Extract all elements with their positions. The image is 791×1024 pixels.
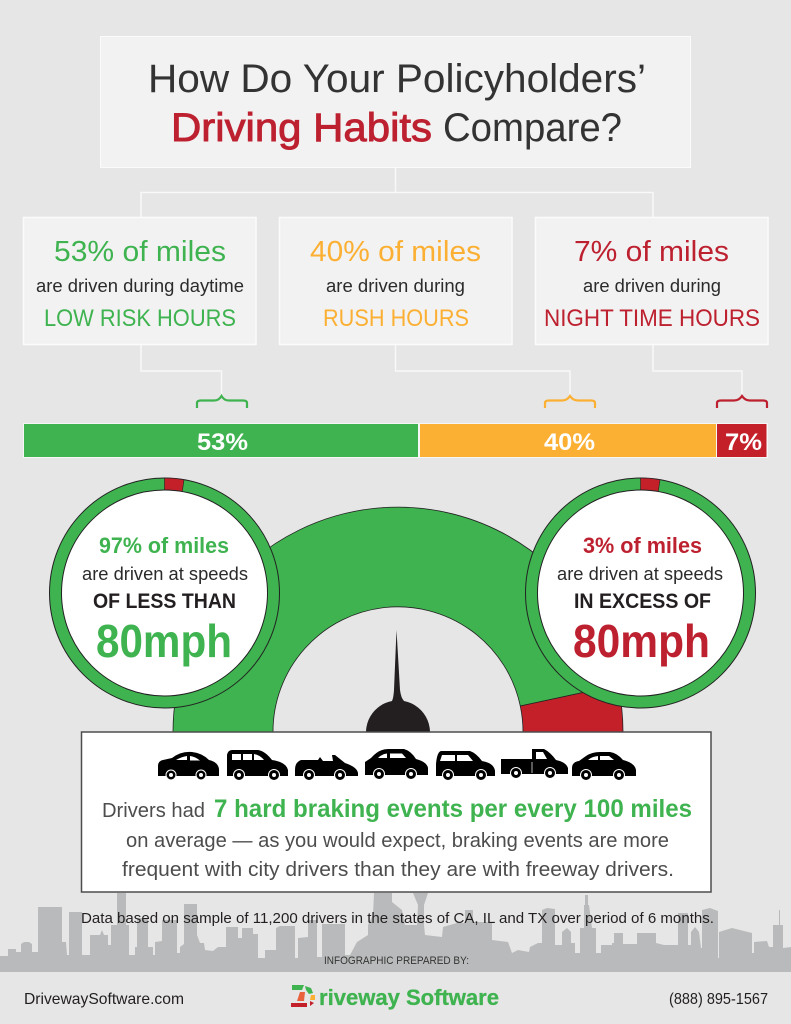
icon: minivan [227, 750, 288, 780]
bar: 53%: 53% [197, 429, 248, 456]
donut: under 80 mph: are driven at speeds [82, 564, 248, 584]
callout line 1: Drivers had [102, 800, 205, 822]
panel: low risk hours: LOW RISK HOURS [44, 305, 236, 332]
connectors: stat boxes to bar braces [141, 345, 742, 396]
panel: night time hours: NIGHT TIME HOURS [544, 305, 760, 332]
gauge: needle [366, 630, 430, 764]
stacked bar chart [23, 423, 768, 458]
panel: rush hours: RUSH HOURS [323, 305, 469, 332]
donut: over 80 mph: 3% of miles [583, 533, 702, 558]
callout line 2: on average — as you would expect, braking events are more [126, 830, 669, 852]
gauge: red arc [520, 685, 623, 732]
panel: rush hours: 40% of miles [310, 236, 481, 268]
callout line 1: 7 hard braking events per every 100 miles [214, 795, 692, 823]
panel: braking callout [82, 732, 711, 892]
donut: under 80 mph: OF LESS THAN [93, 590, 236, 613]
bar: 7%: 7% [725, 429, 762, 456]
icon: pickup truck [501, 749, 568, 778]
panel: low risk hours [24, 218, 256, 344]
icon row: cars [158, 749, 636, 780]
connector: title to stat boxes [141, 168, 653, 217]
title line 1: How Do Your Policyholders’ [148, 57, 646, 101]
title panel [100, 36, 690, 168]
donut: over 80 mph: IN EXCESS OF [574, 590, 711, 613]
title line 2: Driving Habits [171, 106, 432, 150]
donut: over 80 mph [526, 478, 756, 708]
icon: hatchback [436, 751, 495, 780]
footer: phone: (888) 895-1567 [669, 991, 768, 1008]
donut: over 80 mph: 80mph [573, 615, 710, 667]
footer: logo [291, 985, 499, 1010]
gauge: green arc [173, 507, 618, 732]
donut: over 80 mph: are driven at speeds [557, 564, 723, 584]
icon: compact sedan [572, 752, 636, 780]
panel: night time hours: 7% of miles [574, 236, 729, 268]
icon: convertible [295, 755, 358, 780]
panel: night time hours: are driven during [583, 276, 721, 296]
bar: 53% [24, 424, 418, 457]
brace: red [717, 396, 767, 408]
callout line 3: frequent with city drivers than they are with freeway drivers. [122, 859, 674, 881]
title line 2: Compare? [443, 106, 622, 150]
panel: low risk hours: 53% of miles [54, 236, 226, 268]
donut: under 80 mph: 97% of miles [99, 533, 229, 558]
panel: rush hours [280, 218, 512, 344]
icon: coupe sedan [365, 749, 428, 780]
bar: 40% [420, 424, 716, 457]
skyline [0, 893, 791, 972]
brace: orange [545, 396, 595, 408]
footer: website: DrivewaySoftware.com [24, 991, 184, 1008]
logo wordmark: riveway Software [319, 985, 499, 1010]
data source note: Data based on sample of 11,200 drivers in the states of CA, IL and TX over period of 6 months. [81, 910, 714, 927]
brace: green [197, 396, 247, 408]
panel: low risk hours: are driven during daytime [36, 276, 244, 296]
prepared by label: INFOGRAPHIC PREPARED BY: [324, 955, 469, 967]
bar: 40%: 40% [544, 429, 595, 456]
bar: 7% [717, 424, 766, 457]
panel: night time hours [536, 218, 768, 344]
icon: sedan [158, 752, 219, 780]
logo icon [291, 985, 315, 1007]
speedometer gauge [173, 507, 623, 764]
donut: under 80 mph [50, 478, 280, 708]
panel: rush hours: are driven during [326, 276, 465, 296]
donut: under 80 mph: 80mph [96, 615, 232, 667]
